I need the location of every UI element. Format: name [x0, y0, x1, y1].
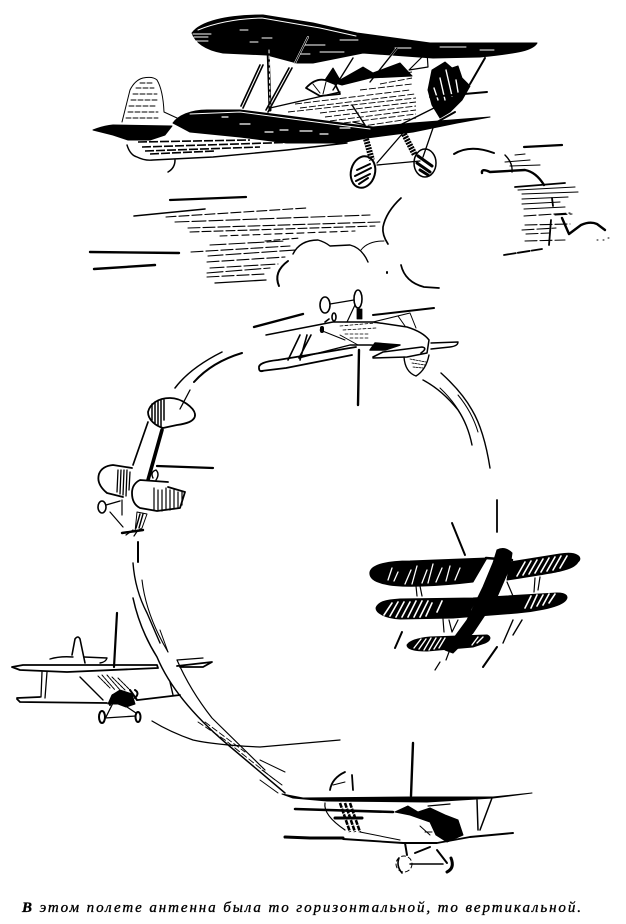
- top plane: fuselage: [127, 72, 440, 160]
- top plane: landing gear: [168, 128, 436, 191]
- diving biplane on right of loop, seen from above: [370, 549, 580, 670]
- right plane: upper wing right: [507, 553, 580, 580]
- top plane: tail fin: [122, 77, 177, 122]
- lower-left plane: upper wing: [12, 658, 212, 672]
- loop trail: upper left: [175, 352, 242, 409]
- top plane: engine and propeller: [428, 62, 487, 126]
- top plane: cockpit and centre section: [306, 63, 412, 96]
- right sky hatching and bird: [482, 145, 609, 255]
- top plane: lower wing: [173, 110, 490, 143]
- left sky hatching: [90, 197, 380, 283]
- top biplane in level flight: [93, 15, 537, 191]
- bottom plane: fin: [330, 772, 353, 790]
- right plane: fuselage and propeller: [445, 549, 512, 653]
- lower-left plane: fuselage and engine: [80, 675, 138, 707]
- bottom plane: lower wing: [285, 798, 513, 843]
- biplane on lower left of loop with vertical antenna: [12, 613, 212, 723]
- lower-left plane: landing gear: [99, 703, 140, 723]
- left plane: fuselage: [110, 422, 162, 532]
- loop trail: lower left: [133, 542, 340, 793]
- caption: В этом полете антенна была то горизонтальной, то вертикальной.: [21, 900, 581, 916]
- top plane: tailplane: [93, 125, 172, 140]
- bottom plane: landing gear: [396, 843, 452, 873]
- left plane: near wing: [132, 470, 185, 511]
- left plane: far wing: [98, 465, 132, 497]
- top plane: wing struts: [241, 37, 485, 112]
- left plane: tail: [148, 398, 195, 428]
- left plane: wheel and propeller: [98, 501, 143, 536]
- lower-left plane: antenna: [114, 613, 117, 667]
- bottom plane: tail and rudder: [295, 803, 393, 832]
- inverted plane: antenna: [358, 350, 359, 405]
- lower-left plane: lower wing: [17, 672, 180, 703]
- clouds and sky hatching: [90, 145, 609, 288]
- loop trail: upper right: [423, 373, 497, 555]
- inverted plane: wings and fuselage: [254, 308, 434, 371]
- bottom plane: antenna: [411, 743, 413, 796]
- right plane: tailplane: [407, 635, 490, 651]
- bottom plane: upper wing: [282, 793, 532, 802]
- bottom plane: fuselage and engine: [360, 804, 463, 842]
- biplane at bottom of loop with vertical antenna: [282, 743, 532, 873]
- inverted plane: tail: [404, 342, 458, 376]
- right plane: upper wing left: [370, 558, 487, 586]
- top plane: upper wing: [192, 15, 537, 82]
- left plane: antenna: [157, 466, 213, 468]
- lower-left plane: fin and tailplane: [50, 637, 107, 663]
- cloud outlines: [277, 149, 494, 288]
- diving biplane on left of loop with horizontal antenna: [98, 398, 213, 536]
- inverted plane: wheels and gear: [320, 290, 362, 322]
- right plane: speed dashes: [395, 620, 522, 670]
- inverted biplane at top of loop with vertical antenna: [254, 290, 458, 405]
- right plane: struts: [416, 577, 540, 632]
- right plane: lower wing: [376, 593, 567, 619]
- loop trail: speed lines around the circle: [133, 352, 497, 793]
